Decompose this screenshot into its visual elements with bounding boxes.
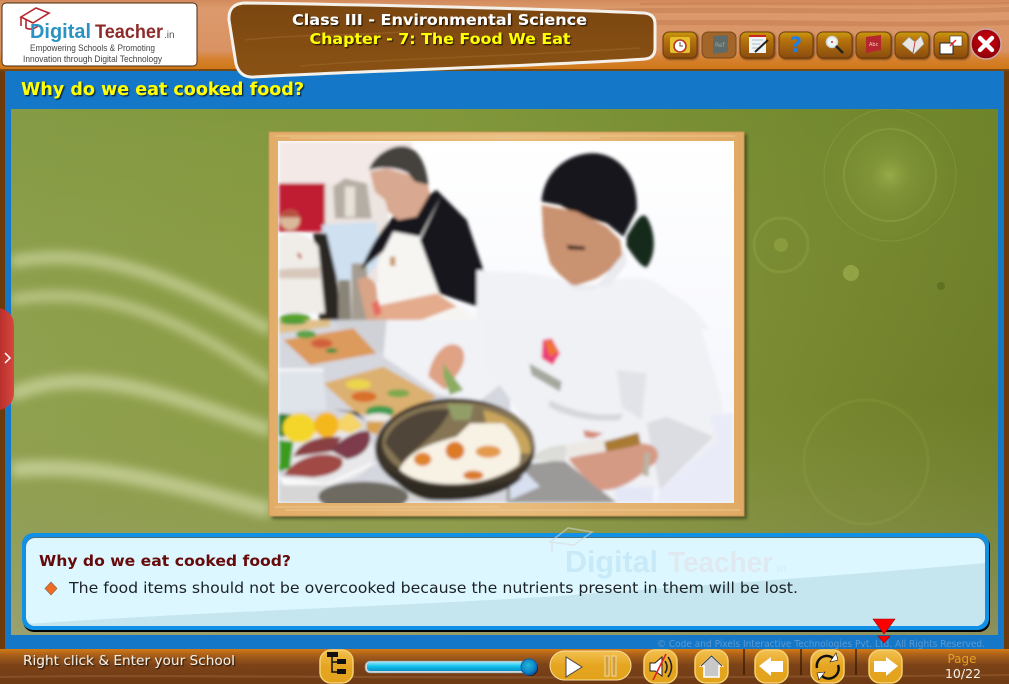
woman lower body and handle (500, 332, 732, 503)
background kitchen and man (279, 142, 490, 330)
header logo card: .in (164, 30, 175, 41)
header logo card: Digital (30, 21, 91, 43)
man (361, 190, 490, 308)
icon: timer folder (663, 32, 697, 58)
header logo card (2, 3, 197, 66)
icon: refresh (811, 650, 844, 683)
icon: next arrow (869, 650, 902, 683)
icon: notepad and pen (740, 32, 774, 58)
icon: dictionary: Abc (869, 42, 879, 48)
callout: explanation box (22, 528, 990, 632)
page counter (945, 652, 981, 681)
icon: dictionary (856, 32, 891, 58)
side panel tab (0, 308, 14, 410)
watermark logo: .in (773, 562, 787, 575)
header title plaque: Class III - Environmental Science (292, 11, 587, 29)
heading: panel title: Why do we eat cooked food? (21, 79, 304, 100)
play and pause pill (550, 651, 631, 680)
food counter (276, 319, 510, 512)
page counter: 10/22 (945, 666, 981, 681)
icon: help: ? (790, 33, 802, 57)
icon: window resize (934, 32, 968, 58)
school prompt: Right click & Enter your School (23, 654, 235, 669)
toolbar icons (663, 29, 1001, 59)
copyright note: © Code and Pixels Interactive Technologies Pvt. Ltd. All Rights Reserved. (657, 639, 985, 650)
header logo card: Innovation through Digital Technology (23, 54, 162, 64)
pointer arrows (873, 619, 895, 643)
watermark logo: Digital (565, 544, 658, 579)
icon: close (971, 29, 1001, 59)
icon: reference book (702, 32, 736, 58)
icon: graduation cap (21, 8, 49, 29)
icon: previous arrow (755, 650, 788, 683)
progress slider (365, 659, 538, 676)
icon: home (695, 650, 728, 683)
page counter: Page (947, 652, 977, 666)
woman upper body (473, 150, 685, 310)
watermark logo: Teacher (668, 547, 773, 579)
icon: open book (895, 32, 929, 58)
icon: help (779, 32, 813, 58)
header title plaque (229, 3, 655, 77)
icon: orange bullet (45, 582, 57, 595)
decorative swirl (11, 257, 270, 510)
photo frame (269, 132, 747, 519)
bottom control bar (0, 649, 1009, 684)
icon: muted sound (644, 650, 677, 683)
decorative bokeh circles (752, 109, 956, 290)
icon: contents tree (320, 650, 353, 683)
header title plaque: Chapter - 7: The Food We Eat (310, 30, 571, 48)
panel: green background (11, 109, 998, 635)
plate of vegetables (278, 430, 375, 483)
callout body text: The food items should not be overcooked because the nutrients present in them will be lost. (68, 579, 798, 597)
header logo card: Empowering Schools & Promoting (30, 43, 155, 53)
frying pan, rice and hand (375, 344, 535, 500)
icon: magnifier (817, 32, 852, 58)
header logo card: Teacher (95, 22, 164, 43)
photo: chefs cooking in a kitchen (276, 141, 734, 512)
watermark logo (550, 528, 787, 579)
toolbar dividers (744, 649, 856, 675)
icon: reference book: Ref (715, 42, 726, 49)
callout heading: Why do we eat cooked food? (39, 552, 291, 570)
